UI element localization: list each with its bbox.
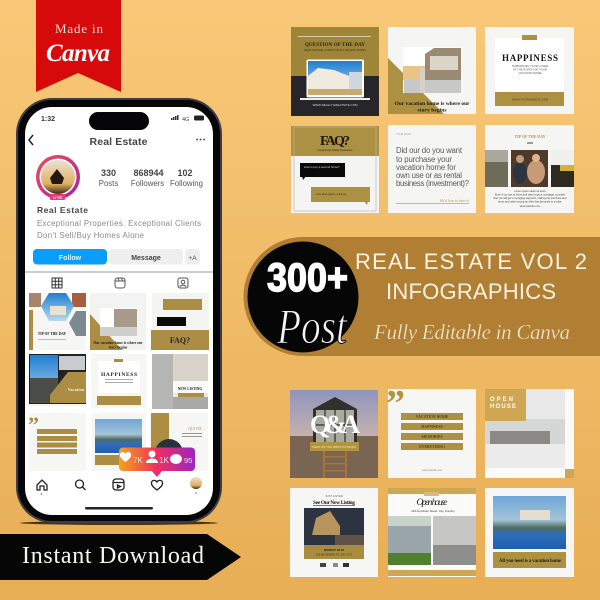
top card: happiness [485, 27, 574, 114]
ribbon: Made in Canva: Made in [55, 21, 104, 36]
bottom card: list: MEMORIES [421, 434, 443, 439]
phone grid post: FAQ: FAQ? [170, 336, 190, 345]
profile stats: Followers [131, 179, 164, 188]
top card: happiness: VACATION HOME [518, 71, 542, 75]
phone grid post: vacation home: Our vacation home is where our [93, 341, 143, 345]
phone grid post: list: ” [28, 412, 39, 437]
top card: question text: vacation home for [396, 163, 456, 172]
profile stats: 102 [177, 168, 193, 178]
profile bio: Don't Sell/Buy Homes Alone [37, 231, 144, 240]
profile tabs [25, 272, 213, 288]
bottom card: list: VACATION HOME [416, 414, 449, 419]
profile buttons [33, 249, 200, 264]
badge: 300+ Post: Post [276, 298, 348, 354]
top card: FAQ: Just start again, a listing. [316, 192, 347, 196]
phone grid post: vacation photo: Vacation [68, 387, 85, 392]
ribbon: Made in Canva [36, 0, 121, 92]
profile buttons: +A [188, 255, 197, 262]
notification bubble [119, 448, 195, 477]
phone grid post: happiness [91, 354, 146, 408]
top card: FAQ [291, 126, 379, 213]
badge: 300+ Post [248, 242, 358, 354]
profile bio [37, 205, 201, 240]
top card: vacation home story: story begins [418, 108, 446, 114]
top card: question text: own use or as rental [396, 171, 462, 180]
profile bio: Exceptional Properties. Exceptional Clients [37, 219, 201, 228]
top card: question of the day: WHAT SHOULD I LOOK FOR IN A HOLIDAY HOME? [304, 48, 366, 52]
bottom card: Q&A [290, 390, 378, 478]
profile header: Real Estate [90, 136, 148, 148]
top card: happiness: AT THE PORCH OF YOUR [513, 68, 547, 72]
phone grid post: vacation home: story begins [109, 346, 128, 350]
ribbon: Made in Canva: Canva [46, 40, 110, 67]
phone grid post: tip of the day [29, 293, 86, 350]
bottom card: list [386, 383, 476, 478]
top card: FAQ: How to buy a second home? [304, 165, 340, 169]
band subtitle: Fully Editable in Canva [373, 320, 570, 344]
status bar: 1:32 [41, 116, 55, 123]
band headline: INFOGRAPHICS [386, 279, 556, 304]
bottom card: new listing: 123 ANYWHERE ST., ANY CITY [316, 554, 352, 556]
dynamic island [89, 112, 149, 130]
bottom card: all you need: All you need is a vacation home [499, 559, 561, 564]
top card: question of the day: QUESTION OF THE DAY [305, 43, 365, 48]
top card: vacation home story: Our vacation home is where our [394, 101, 470, 107]
band headline: REAL ESTATE VOL 2 [355, 249, 587, 274]
top card: question text [388, 125, 476, 213]
top card: FAQ: Frequently Asked Questions [318, 148, 353, 152]
top card: question of the day: WWW.REALLYGREATSITE.COM [312, 103, 358, 107]
avatar: LIVE [53, 195, 62, 200]
top card: question text: YOUR LOGO [396, 133, 411, 136]
bottom card: open house [485, 389, 574, 478]
phone grid post: quote: QUOTE [188, 426, 202, 431]
phone grid post: happiness: HAPPINESS [101, 372, 137, 378]
badge: 300+ Post: 300+ [267, 256, 348, 300]
top card: tip of the day: TIP OF THE DAY [514, 134, 546, 139]
nav avatar and dots [41, 477, 202, 495]
banner: Instant Download: Instant Download [22, 543, 204, 569]
profile header [29, 135, 205, 148]
notification bubble: 1K [159, 456, 169, 465]
profile stats: Following [170, 179, 203, 188]
bottom card: open house script: Open house [416, 498, 448, 508]
profile stats: Posts [99, 179, 118, 188]
banner: Instant Download [0, 534, 241, 580]
profile buttons: Follow [59, 255, 82, 262]
top card: happiness: IS BRINGING YOUR LOVED [512, 64, 548, 68]
top card: happiness: WWW.YOURWEBSITE.COM [512, 98, 549, 102]
phone grid post: FAQ [151, 293, 209, 350]
status bar: 4G [182, 117, 189, 123]
bottom card: new listing: See Our New Listing [313, 500, 355, 506]
profile bio: Real Estate [37, 205, 88, 215]
phone grid post: list [28, 412, 86, 471]
bottom card: open house script [388, 488, 476, 577]
top card: tip of the day [485, 125, 574, 213]
phone grid post: lake [92, 413, 146, 471]
top card: happiness: HAPPINESS [502, 53, 558, 63]
bottom card: list: ” [386, 383, 405, 425]
bottom card: list: www.website.com [422, 469, 442, 472]
profile buttons: Message [131, 255, 161, 262]
top card: tip of the day: Even if you are at home and plan to get a mortgage, consider [495, 192, 565, 196]
phone grid post: vacation photo [29, 354, 86, 406]
top card: vacation home story [388, 27, 476, 114]
bottom card: list: HAPPINESS [421, 424, 443, 429]
top card: tip of the day: home and often paying an offer that demands to a wide. [498, 200, 562, 204]
bottom card: open house script: 123 Anywhere Street, City, Country [411, 509, 455, 513]
top card: question text: business (investment)? [396, 179, 470, 188]
avatar [36, 155, 80, 200]
bottom card: open house: OPEN [490, 397, 513, 403]
status bar [41, 115, 204, 123]
bottom navigation [37, 479, 163, 490]
band headline [355, 249, 587, 304]
phone grid post: new listing: NEW LISTING [178, 387, 202, 391]
profile stats: 868944 [133, 168, 164, 178]
gold band [244, 237, 600, 356]
phone grid post: tip of the day: TIP OF THE DAY [38, 332, 67, 336]
profile stats [99, 168, 203, 188]
phone grid post: quote [150, 413, 208, 471]
top card: question text: We'd love to hear it [440, 199, 470, 203]
notification bubble: 95 [184, 456, 192, 465]
top card: tip of the day: Lorem ipsum dolor sit amet [514, 189, 546, 193]
notification bubble: 7K [133, 456, 143, 465]
phone grid post: new listing [152, 354, 208, 409]
top card: FAQ: FAQ? [320, 134, 350, 149]
top card: question text: Did our do you want [396, 146, 463, 155]
bottom card: list: EVERYTHING [419, 444, 445, 449]
phone mockup [16, 98, 222, 525]
top card: question of the day [291, 27, 379, 116]
top card: question text: to purchase your [396, 155, 452, 164]
top card: tip of the day: that you will get a mortgage payment, making the purchase and [494, 196, 567, 200]
bottom card: Q&A: Q&A [310, 410, 360, 439]
bottom card: Q&A: WHAT DO YOU WANT TO KNOW? [312, 445, 357, 449]
bottom card: all you need [485, 488, 574, 577]
bottom card: open house: HOUSE [490, 404, 516, 410]
top card: tip of the day: www.website.com [520, 204, 540, 208]
phone grid post: vacation home [90, 293, 146, 350]
bottom card: new listing: MONDAY 09:30 [324, 548, 344, 552]
bottom card: new listing [290, 488, 378, 577]
profile stats: 330 [101, 168, 116, 178]
bottom card: new listing: JUST LISTED [325, 494, 343, 498]
